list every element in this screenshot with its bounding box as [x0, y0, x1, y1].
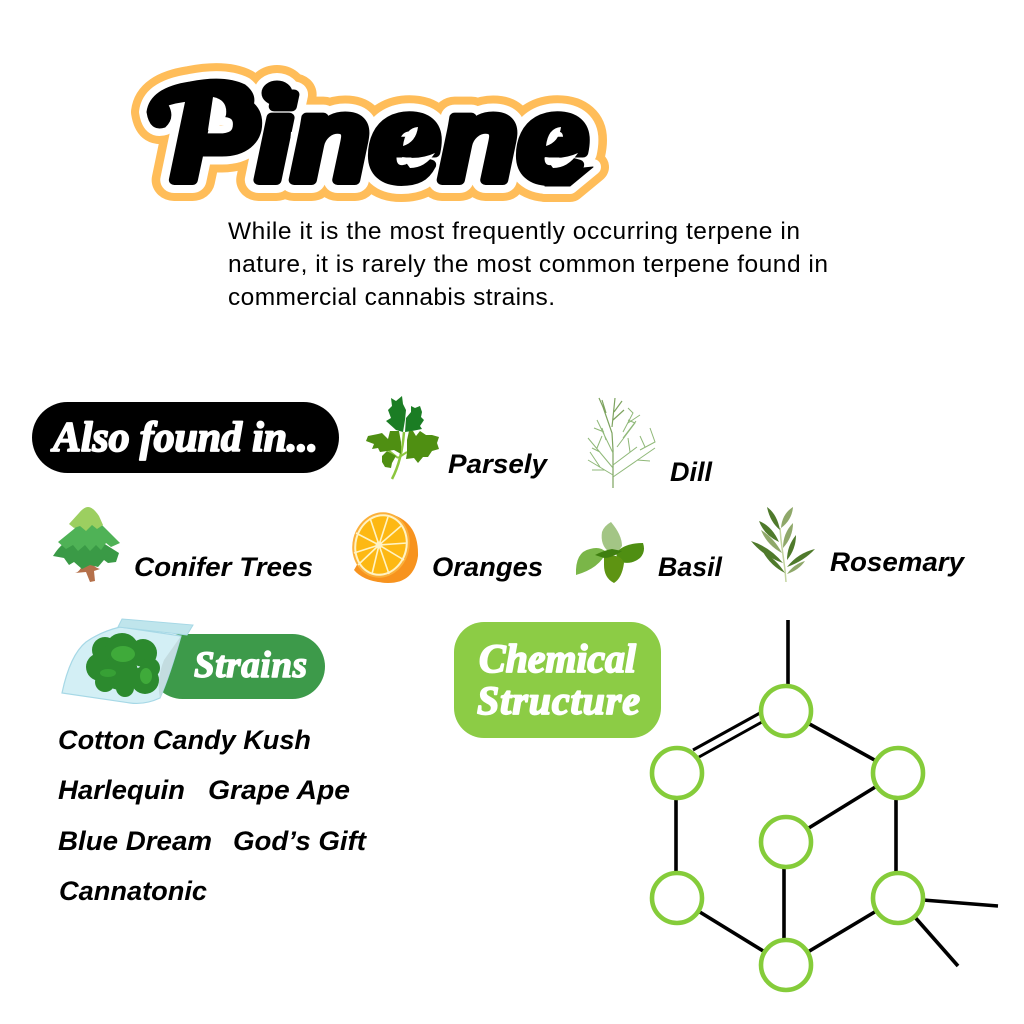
heading: strains: Strains — [194, 645, 307, 686]
label: rosemary: Rosemary — [830, 547, 966, 577]
intro text block: nature, it is rarely the most common terpene found in — [228, 251, 828, 278]
icon: conifer tree — [53, 507, 120, 582]
heading: chemical structure: Structure — [477, 678, 640, 723]
strain names: Cannatonic — [59, 876, 207, 906]
strain names: Blue Dream — [58, 826, 212, 856]
title: Pinene — [172, 74, 588, 206]
label: conifer trees: Conifer Trees — [134, 552, 313, 582]
label: dill: Dill — [670, 457, 712, 487]
heading: strains — [150, 634, 325, 699]
heading: chemical structure — [454, 622, 661, 738]
heading: chemical structure: Chemical — [479, 636, 637, 681]
strain names: Grape Ape — [208, 775, 350, 805]
intro text block: While it is the most frequently occurring terpene in — [228, 218, 800, 245]
icon: basil — [576, 522, 644, 583]
strain names: Harlequin — [58, 775, 185, 805]
label: oranges: Oranges — [432, 552, 543, 582]
icon: bag of buds — [62, 619, 193, 703]
chemical structure diagram — [652, 620, 998, 990]
label: parsley: Parsely — [448, 449, 549, 479]
intro text block — [228, 218, 828, 311]
intro text block: commercial cannabis strains. — [228, 284, 555, 311]
strain names — [58, 725, 367, 906]
icon: parsley — [366, 396, 439, 479]
icon: rosemary — [751, 507, 815, 582]
strain names: Cotton Candy Kush — [58, 725, 311, 755]
heading: also found in — [32, 402, 339, 473]
strain names: God’s Gift — [233, 826, 367, 856]
icon: dill — [588, 398, 655, 488]
label: basil: Basil — [658, 552, 722, 582]
heading: also found in: Also found in... — [50, 415, 318, 461]
title: Pinene — [172, 74, 588, 206]
icon: orange — [345, 506, 418, 584]
title: Pinene — [172, 74, 588, 206]
